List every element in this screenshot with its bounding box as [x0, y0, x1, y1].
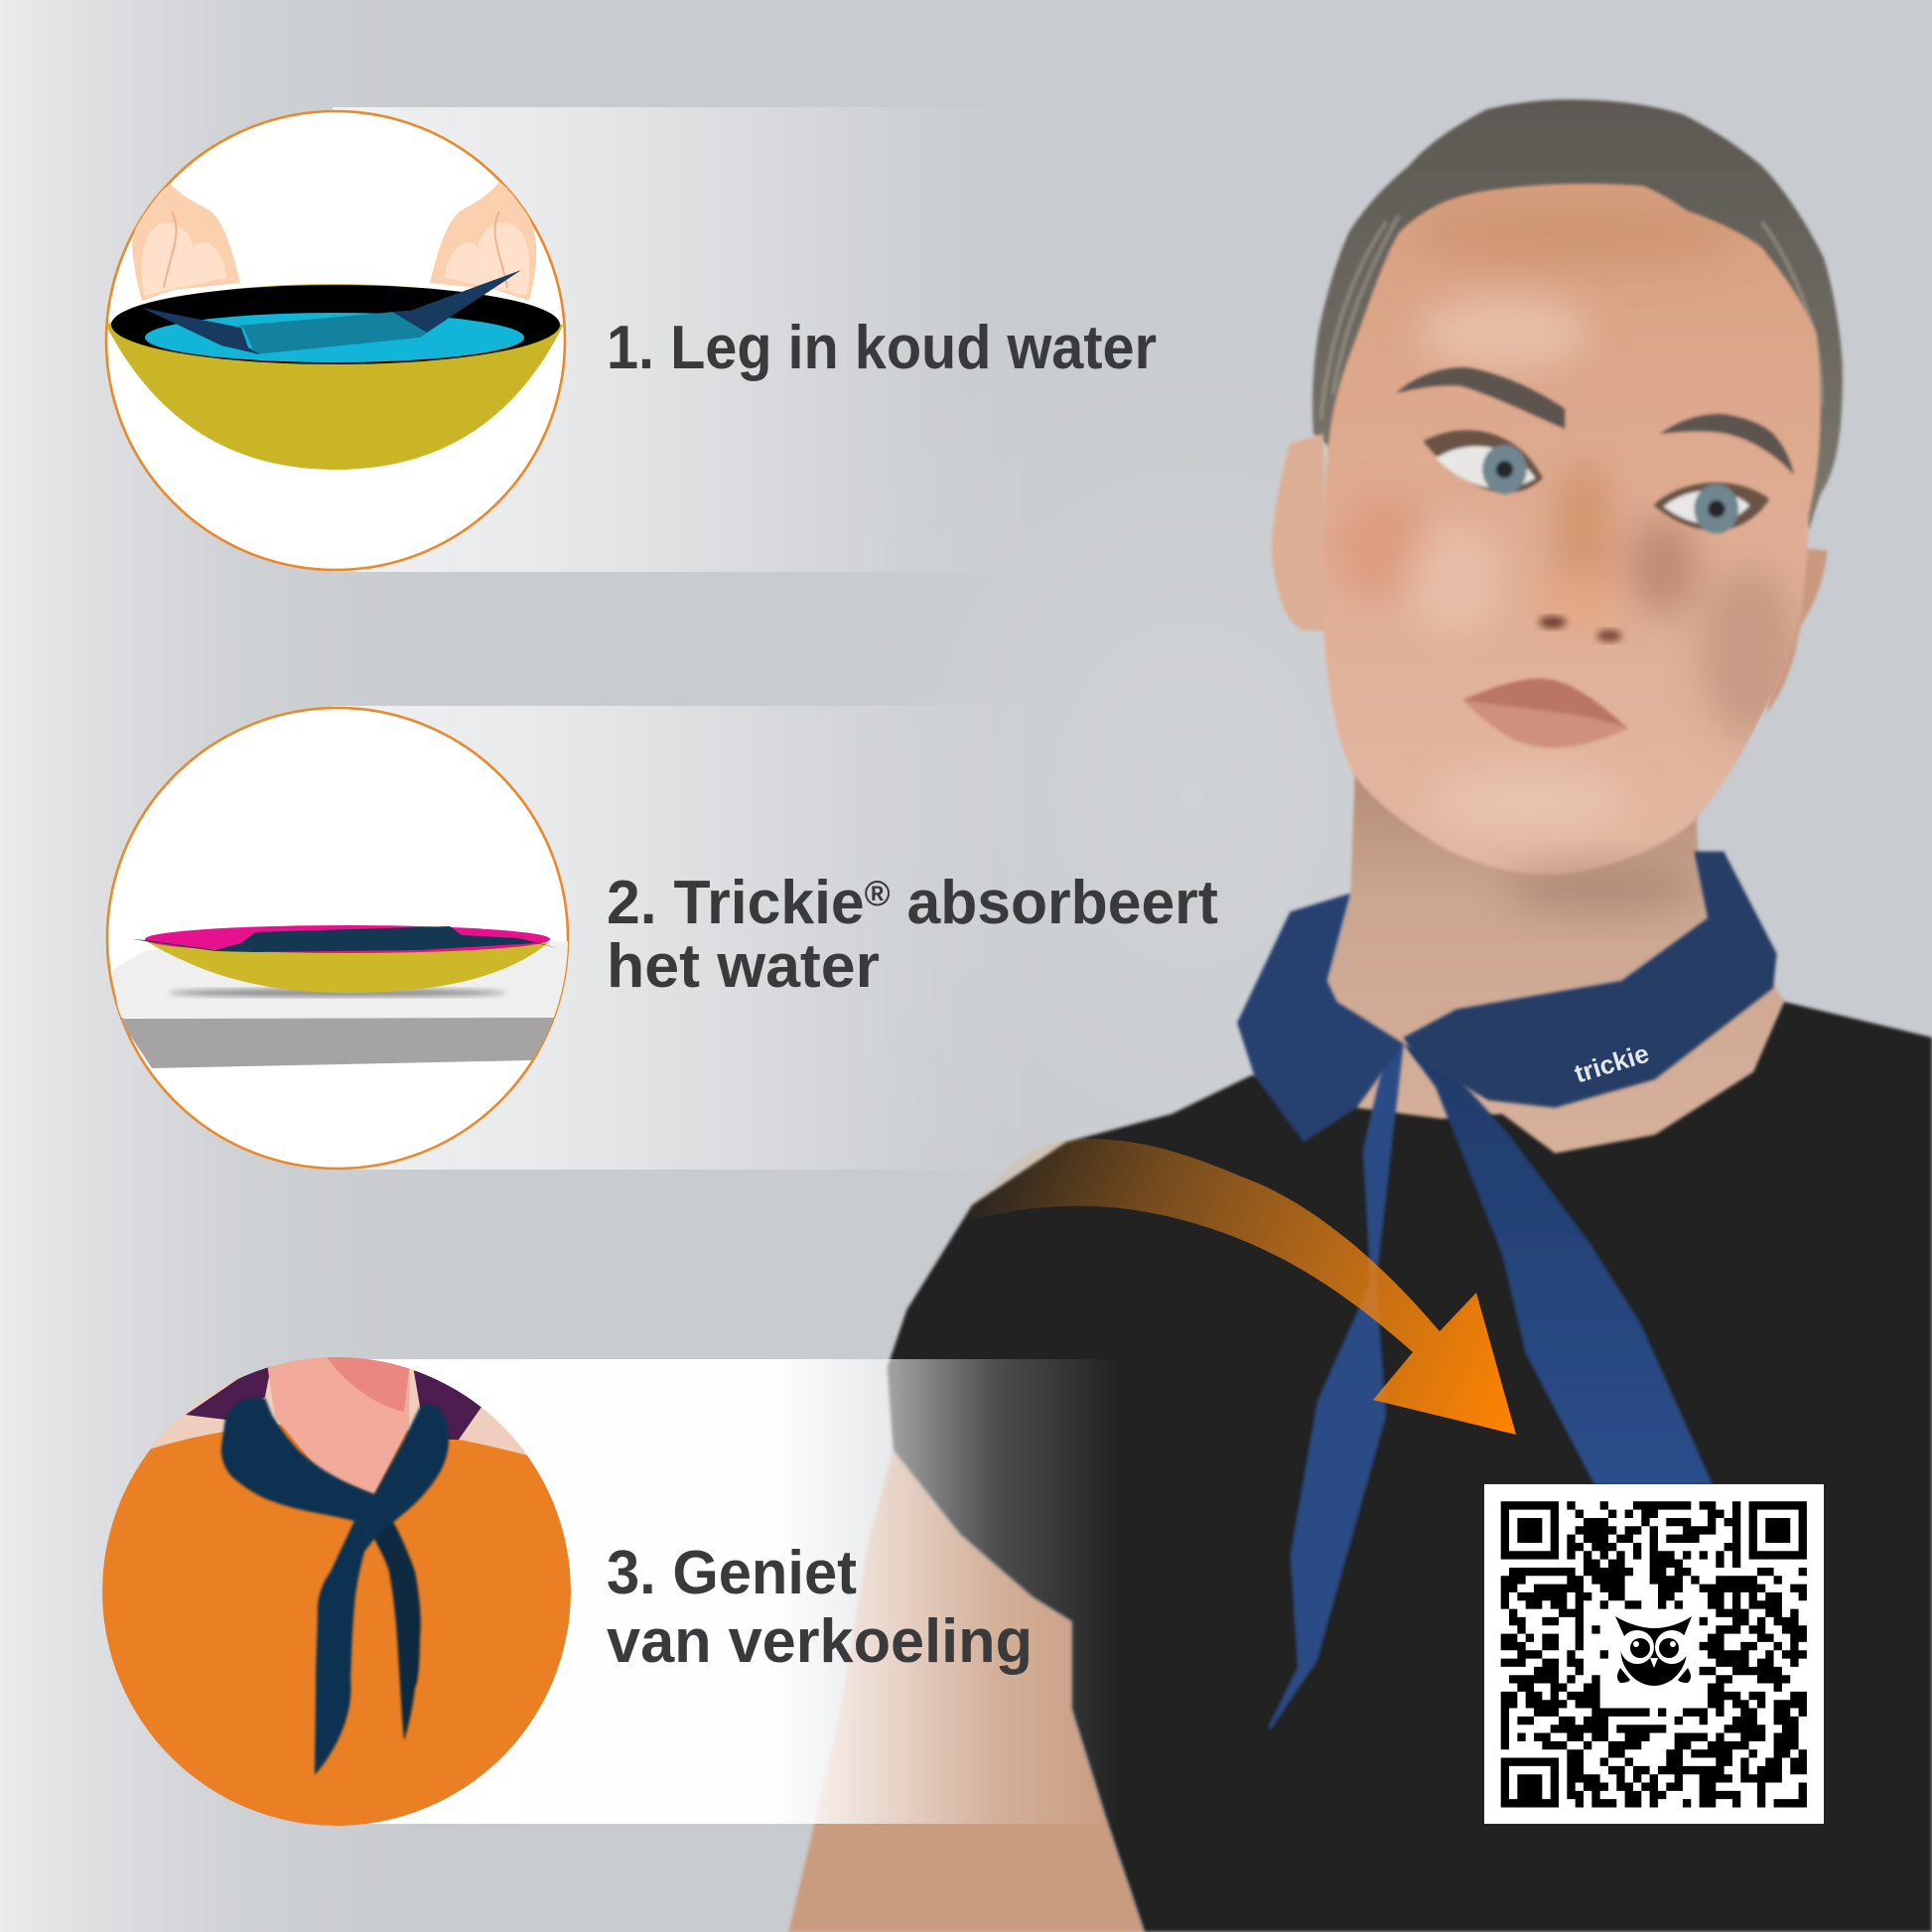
chin shadow: [1503, 865, 1701, 914]
band: step 2: [333, 706, 1057, 1170]
icon: purple collar: [186, 1366, 482, 1440]
icon: bowl body: [106, 284, 563, 470]
neck: [1327, 763, 1784, 1154]
arm: [788, 1450, 1145, 1932]
icon: bowl inside: [111, 285, 560, 364]
icon: step 2 plate on table: [107, 708, 571, 1169]
ears: [1272, 434, 1328, 630]
icon: magenta water: [145, 925, 550, 953]
hair: [1312, 99, 1843, 530]
eyebrows: [1396, 367, 1794, 475]
QR modules: [1501, 1505, 1807, 1803]
icon: water: [145, 313, 524, 362]
text: step 3: [607, 1539, 1033, 1676]
arrow: [960, 1139, 1516, 1435]
icon: cloth right flap: [392, 270, 521, 333]
band: step 1: [333, 107, 1057, 572]
text: step 2: absorbeert: [891, 869, 1218, 937]
scarf collar: left knot: [1237, 894, 1404, 1142]
icon: flat cloth: [132, 926, 558, 952]
text: step 3: van verkoeling: [607, 1607, 1033, 1676]
icon: table top: [112, 941, 571, 1018]
scarf tail: left: [1268, 1043, 1404, 1730]
eye: left: [1423, 430, 1543, 494]
band: step 3: [333, 1359, 1127, 1824]
icon: plate: [146, 941, 549, 993]
icon: scarf tail right: [374, 1499, 421, 1740]
scarf logo text: trickie: [1571, 1038, 1652, 1089]
icon: neck: [265, 1350, 410, 1494]
black t-shirt: [888, 1002, 1932, 1932]
icon: submerged cloth: [238, 311, 427, 354]
facial shading: [1337, 200, 1799, 835]
scarf tail: right: [1404, 1043, 1713, 1485]
icon: left hand: [132, 184, 240, 301]
icon: owl: [1615, 1616, 1692, 1686]
icon: chin shadow: [328, 1357, 409, 1412]
text: step 2: het water: [607, 932, 880, 1001]
text: step 1: 1. Leg in koud water: [607, 314, 1157, 382]
text: step 2: 2. Trickie: [607, 869, 870, 937]
icon: table front: [119, 1018, 561, 1068]
icon: scarf collar: [221, 1398, 449, 1539]
icon: plate shadow: [169, 989, 506, 997]
QR code: [1484, 1484, 1824, 1824]
text: step 2: [607, 869, 1218, 1001]
photo: woman wearing cooling scarf: [788, 99, 1932, 1932]
face: [1322, 184, 1821, 875]
icon: shoulders: [151, 1357, 527, 1455]
icon: step 3 scarf being worn: [99, 1350, 576, 1826]
lips: [1462, 678, 1627, 748]
scarf collar: right band: [1404, 852, 1777, 1108]
eye: right: [1654, 483, 1769, 533]
nose: [1539, 574, 1621, 642]
text: step 2: ®: [865, 873, 891, 913]
icon: scarf tail left: [315, 1521, 374, 1775]
icon: cloth left flap: [142, 308, 260, 354]
text: step 3: 3. Geniet: [607, 1539, 857, 1607]
icon: right hand: [430, 182, 536, 301]
icon: step 1 bowl of water: [106, 111, 565, 570]
